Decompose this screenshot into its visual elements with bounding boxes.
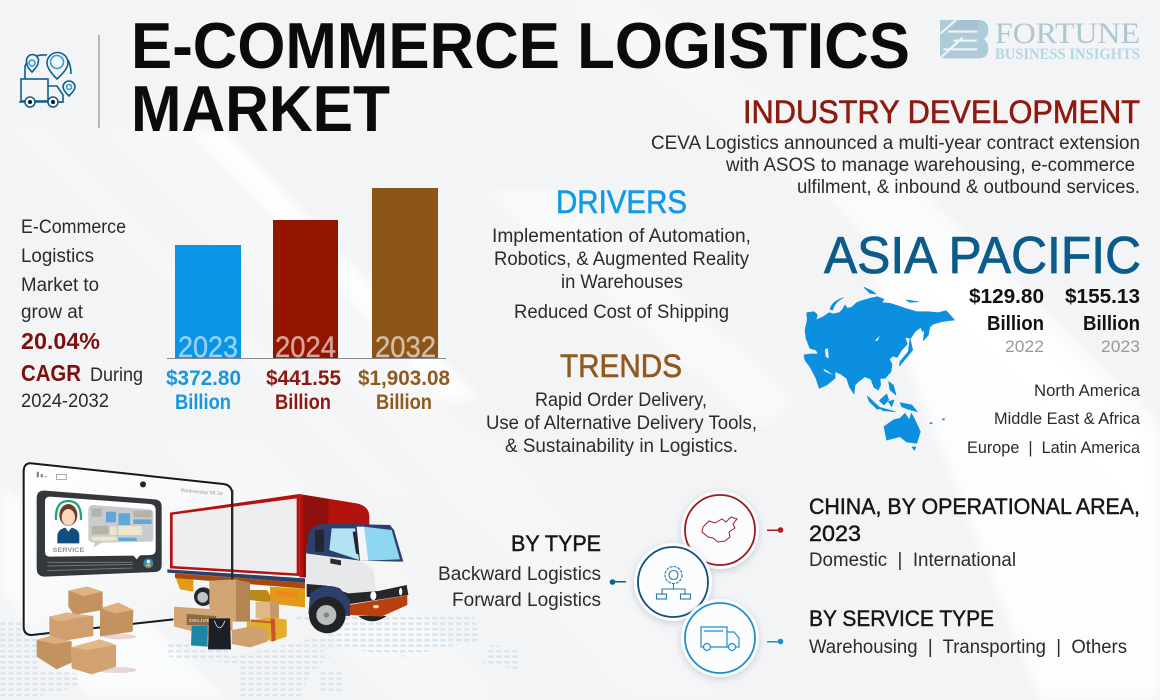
text block: industry development detail: CEVA Logistics announced a multi-year contract extension xyxy=(651,133,1140,154)
tablet xyxy=(24,463,232,635)
stat: 2022 value: $129.80 xyxy=(969,286,1044,308)
connector: by service type xyxy=(767,639,783,644)
logo: Fortune Business Insights: BUSINESS INSIGHTS xyxy=(995,46,1140,63)
heading and list: China by operational area xyxy=(809,494,1140,571)
dotted world map xyxy=(0,615,520,697)
agent: SERVICE xyxy=(53,547,85,554)
stat: 2023 value: Billion xyxy=(1083,313,1140,335)
stat: 2023 value: 2023 xyxy=(1101,337,1140,356)
stat: 2022 value: 2022 xyxy=(1005,337,1044,356)
map: asia pacific xyxy=(804,287,954,450)
illustration: tablet, delivery truck and parcels xyxy=(0,463,520,697)
heading and list: by type: Backward Logistics xyxy=(438,564,601,585)
tablet: Wednesday 08.39 xyxy=(180,488,223,497)
text block: other regions xyxy=(967,381,1141,457)
icon circle: gear and network xyxy=(634,543,712,621)
stacked parcels and shopping bags, right xyxy=(174,579,287,649)
text block: drivers list xyxy=(492,226,751,323)
heading and list: by service type: BY SERVICE TYPE xyxy=(809,606,994,631)
heading and list: China by operational area: Domestic | International xyxy=(809,550,1016,571)
truck xyxy=(167,494,408,633)
text block: trends list xyxy=(486,390,757,457)
text block: industry development detail xyxy=(651,133,1140,198)
stat: 2022 value: Billion xyxy=(987,313,1044,335)
text block: CAGR statement: grow at xyxy=(21,302,84,323)
bar: 2024: 2024 xyxy=(275,331,336,364)
title xyxy=(131,9,910,145)
stacked parcels and shopping bags, right: DELIVER xyxy=(189,618,215,624)
stat: 2022 value xyxy=(969,286,1044,356)
text block: trends list: & Sustainability in Logistics. xyxy=(505,436,738,457)
text block: other regions: North America xyxy=(1034,381,1141,400)
stat: 2023 value xyxy=(1065,286,1140,356)
heading: drivers: DRIVERS xyxy=(556,184,687,220)
text block: CAGR statement: Market to xyxy=(21,275,99,296)
value: 2023: $372.80 xyxy=(166,367,241,390)
heading and list: China by operational area: 2023 xyxy=(809,521,861,546)
text block: CAGR statement: 20.04% xyxy=(21,328,100,354)
value: 2024 xyxy=(266,367,341,414)
text block: CAGR statement: CAGR xyxy=(21,360,81,386)
title: E-COMMERCE LOGISTICS xyxy=(131,9,910,82)
text block: drivers list: in Warehouses xyxy=(561,272,683,293)
text block: trends list: Rapid Order Delivery, xyxy=(535,390,707,411)
value: 2032 xyxy=(358,367,450,414)
connector: by type xyxy=(610,579,626,585)
connector: China xyxy=(767,527,783,533)
text block: other regions: Europe | Latin America xyxy=(967,438,1141,457)
icon circle: delivery truck xyxy=(681,599,759,677)
text block: industry development detail: ulfilment, & inbound & outbound services. xyxy=(797,177,1140,198)
text block: CAGR statement: During xyxy=(90,365,143,386)
text block: CAGR statement: 2024-2032 xyxy=(21,391,109,412)
heading and list: by service type xyxy=(809,606,1127,658)
heading and list: by type: BY TYPE xyxy=(511,531,601,556)
bar: 2023: 2023 xyxy=(178,331,238,364)
heading and list: China by operational area: CHINA, BY OPERATIONAL AREA, xyxy=(809,494,1140,519)
text block: industry development detail: with ASOS to manage warehousing, e-commerce xyxy=(725,155,1135,176)
value: 2024: $441.55 xyxy=(266,367,341,390)
agent xyxy=(53,501,85,554)
icon circle: China map xyxy=(681,491,759,569)
heading: industry development: INDUSTRY DEVELOPMENT xyxy=(743,94,1140,130)
tablet edge in front of truck xyxy=(231,490,233,580)
bar: 2032: 2032 xyxy=(375,331,436,364)
value: 2023: Billion xyxy=(175,391,231,414)
title: MARKET xyxy=(131,72,390,145)
map screen xyxy=(88,505,153,548)
stat: 2023 value: $155.13 xyxy=(1065,286,1140,308)
value: 2032: $1,903.08 xyxy=(358,367,450,390)
logo: Fortune Business Insights xyxy=(940,17,1140,63)
heading: trends: TRENDS xyxy=(560,348,682,384)
bar chart: market size xyxy=(166,188,450,414)
heading and list: by service type: Warehousing | Transporting | Others xyxy=(809,637,1127,658)
text block: drivers list: Implementation of Automation, xyxy=(492,226,751,247)
stacked parcels, left xyxy=(37,587,137,674)
heading and list: by type xyxy=(438,531,601,611)
heading: asia pacific: ASIA PACIFIC xyxy=(824,227,1141,285)
bar: 2032 xyxy=(372,188,438,364)
text block: other regions: Middle East & Africa xyxy=(994,409,1141,428)
bar: 2024 xyxy=(273,220,338,364)
text block: CAGR statement: E-Commerce xyxy=(21,217,126,238)
text block: CAGR statement xyxy=(21,217,143,412)
icon: delivery truck with map pins xyxy=(19,52,75,107)
value: 2024: Billion xyxy=(275,391,331,414)
text block: drivers list: Reduced Cost of Shipping xyxy=(514,302,729,323)
value: 2032: Billion xyxy=(376,391,432,414)
heading and list: by type: Forward Logistics xyxy=(452,590,601,611)
text block: trends list: Use of Alternative Delivery Tools, xyxy=(486,413,757,434)
text block: CAGR statement: Logistics xyxy=(21,246,94,267)
value: 2023 xyxy=(166,367,241,414)
logo: Fortune Business Insights: FORTUNE xyxy=(995,17,1140,50)
bar: 2023 xyxy=(175,245,241,364)
text block: drivers list: Robotics, & Augmented Reality xyxy=(494,249,749,270)
